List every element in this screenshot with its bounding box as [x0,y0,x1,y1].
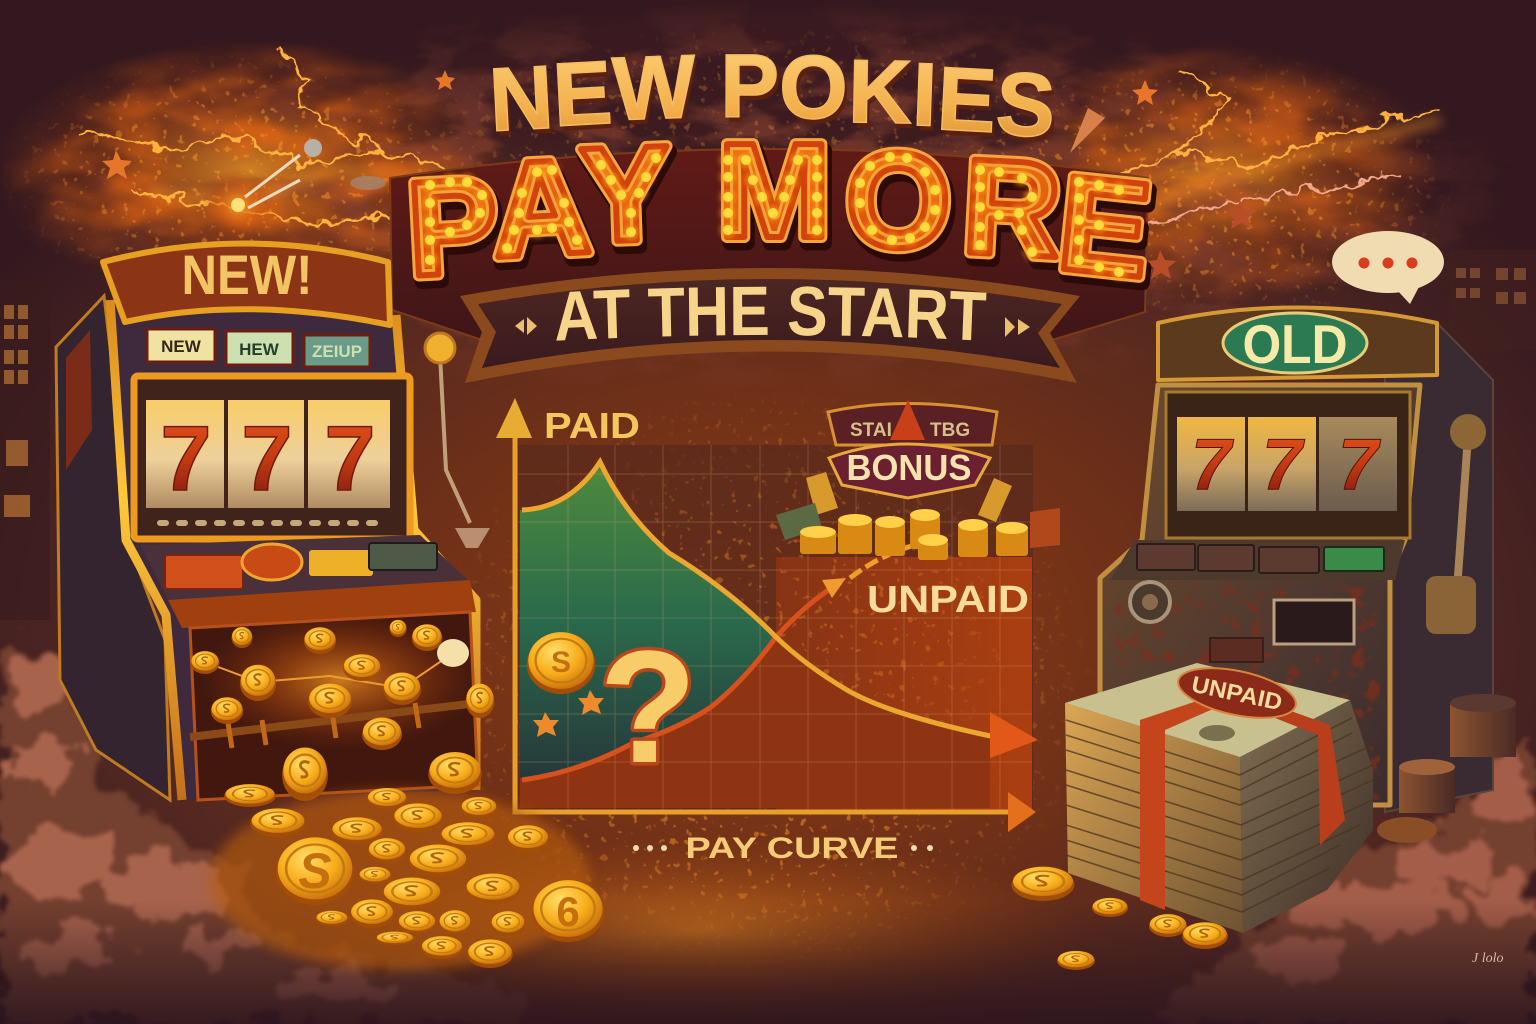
button panel [140,535,476,628]
sign ribbon [828,404,997,445]
gold trim [110,300,476,800]
sparkle lever top left [202,139,386,241]
buttons [1110,540,1405,580]
large coin right: 6 [556,888,580,935]
side vent [66,330,92,470]
bonus sign and coin pile [776,400,1060,560]
dial [1130,582,1170,622]
clouds: bottom left [0,640,540,1024]
signature: J lolo [1472,951,1504,966]
label: pay curve [633,832,933,865]
reels [1166,392,1410,538]
coin tray [190,610,480,800]
coin stacks [800,515,1028,560]
clouds: bottom right [1150,740,1536,1024]
banner: pay more [390,108,1148,340]
bonus sign and coin pile: STAI [850,420,892,441]
marquee bulbs glow [430,157,1119,272]
coin in chart [527,632,595,694]
coin in chart: S [551,646,571,679]
banner: at the start [460,268,1080,383]
label: unpaid: UNPAID [867,579,1029,621]
arrow: x axis [1008,792,1036,832]
slot machine: new [56,243,494,801]
label: unpaid tag [1174,659,1300,727]
marquee bulbs [430,157,1119,272]
bonus sign and coin pile: TBG [930,420,970,441]
banner: at the start: AT THE START [556,286,986,341]
grid lines [518,445,1032,810]
coin slot and plate [1210,600,1354,662]
green paid area [520,462,776,778]
reels: 7 [241,408,293,510]
mini labels [147,329,370,367]
side panel [1385,323,1493,812]
mini labels: NEW [161,337,202,356]
curve: falling paid [522,462,995,737]
chart: pay curve [496,398,1038,865]
straps [1140,690,1245,910]
reels: 7 [1191,425,1234,505]
large coin left [276,837,354,905]
axes [515,430,1012,812]
orange unpaid area [520,637,990,808]
lever [1426,414,1486,634]
bill portrait [1199,725,1235,741]
reels: 7 [1338,425,1381,505]
headline: pay more: PAY MORE [404,115,1157,306]
title: new pokies: NEW POKIES [490,40,1061,161]
arrow: rising curve tip [822,578,846,598]
arrow: falling curve [990,712,1038,758]
coin stacks right [1377,694,1516,843]
lightning and stars [80,50,1440,279]
distant buildings left [0,280,50,620]
coins falling [191,620,494,801]
headline: pay more: PAY MORE [404,115,1157,306]
right face [1240,700,1373,933]
large coin right [532,880,604,942]
reels [134,376,410,539]
plaque [829,444,990,498]
label: paid: PAID [544,405,640,446]
reels: 7 [160,408,212,510]
arrow: y axis [496,398,532,438]
stack of cash [1065,659,1373,933]
distant buildings right [1450,250,1536,350]
small stars [533,690,604,737]
sign: new: NEW! [182,243,312,306]
cabinet [1100,385,1420,805]
sign: new [103,243,390,325]
note lines [1066,718,1373,912]
slot machine: old [1100,308,1493,812]
reels: 7 [1262,425,1305,505]
mini labels: ZEIUP [312,342,362,361]
chart panel and grid [518,445,1033,810]
sign: old [1158,308,1437,380]
bonus sign and coin pile: BONUS [846,447,972,488]
question mark: ? [599,617,697,796]
speech bubble [1332,231,1444,304]
large coin left: S [298,843,332,899]
mini labels: HEW [239,340,280,359]
side panel [56,296,170,800]
reels: 7 [324,408,376,510]
bottom vignette [0,900,1536,1024]
coins by the cash [1012,867,1228,970]
headline: pay more: PAY MORE [407,121,1160,312]
left face [1065,703,1243,933]
curve: rising unpaid [522,587,833,780]
top face [1065,663,1350,757]
curve: rising dashes to bonus [850,545,915,578]
lever [425,333,490,548]
tickets and cash [806,472,1012,522]
coin pile [210,784,604,970]
label: pay curve: PAY CURVE [686,832,898,865]
title: new pokies: NEW POKIES [487,35,1058,156]
cabinet front [108,300,478,800]
label: unpaid tag: UNPAID [1189,671,1285,715]
sign: old: OLD [1242,313,1348,375]
